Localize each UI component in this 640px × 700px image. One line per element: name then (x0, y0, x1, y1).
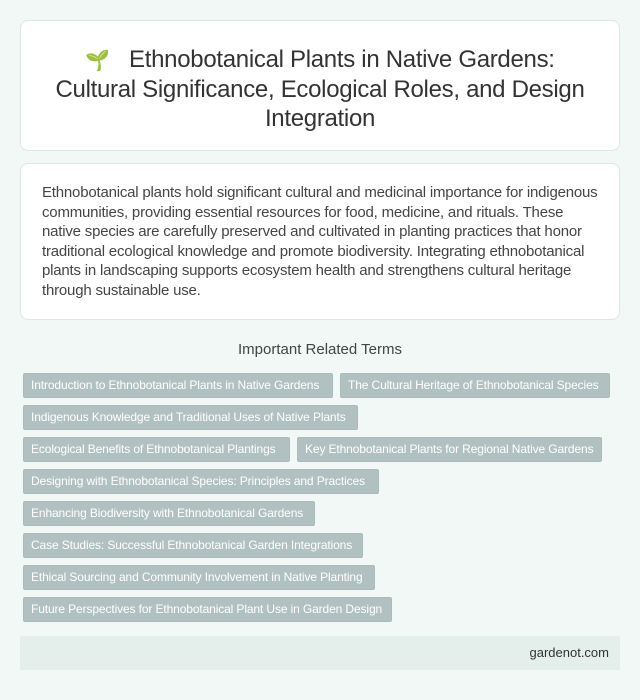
description card (20, 163, 620, 320)
description text: traditional ecological knowledge and promote biodiversity. Integrating ethnobotanical (42, 242, 584, 260)
tag 2: The Cultural Heritage of Ethnobotanical Species (348, 378, 599, 392)
footer: gardenot.com (530, 645, 609, 660)
description text (42, 184, 598, 298)
tag 10 (23, 597, 392, 622)
footer (20, 636, 620, 670)
title text: Cultural Significance, Ecological Roles, and Design (56, 76, 584, 102)
tag 2 (340, 373, 610, 398)
tag 8 (23, 533, 363, 558)
tag 5: Key Ethnobotanical Plants for Regional Native Gardens (305, 442, 593, 456)
tag 6 (23, 469, 379, 494)
description text: native species are carefully preserved and cultivated in planting practices that honor (42, 223, 582, 240)
description text: plants in landscaping supports ecosystem health and strengthens cultural heritage (42, 262, 571, 279)
tag 1: Introduction to Ethnobotanical Plants in Native Gardens (31, 378, 319, 392)
title text: Integration (265, 105, 375, 132)
description text: Ethnobotanical plants hold significant cultural and medicinal importance for indigenous (42, 184, 597, 201)
title text (56, 46, 584, 132)
tag 3 (23, 405, 358, 430)
tag 3: Indigenous Knowledge and Traditional Uses of Native Plants (31, 410, 346, 424)
title text: 🌱 Ethnobotanical Plants in Native Gardens: (85, 46, 555, 73)
description text: through sustainable use. (42, 282, 201, 298)
tag 8: Case Studies: Successful Ethnobotanical Garden Integrations (31, 538, 352, 552)
tag 4: Ecological Benefits of Ethnobotanical Plantings (31, 442, 276, 456)
tag 9 (23, 565, 375, 590)
tag 5 (297, 437, 602, 462)
tag 1 (23, 373, 333, 398)
tag 7 (23, 501, 315, 526)
tag 9: Ethical Sourcing and Community Involvement in Native Planting (31, 570, 363, 584)
tag 6: Designing with Ethnobotanical Species: Principles and Practices (31, 474, 365, 488)
tag 4 (23, 437, 290, 462)
tag 7: Enhancing Biodiversity with Ethnobotanical Gardens (31, 506, 303, 520)
tag 10: Future Perspectives for Ethnobotanical Plant Use in Garden Design (31, 602, 382, 616)
heading: related terms: Important Related Terms (238, 341, 402, 358)
description text: communities, providing essential resources for food, medicine, and rituals. These (42, 204, 563, 220)
title card (20, 20, 620, 151)
